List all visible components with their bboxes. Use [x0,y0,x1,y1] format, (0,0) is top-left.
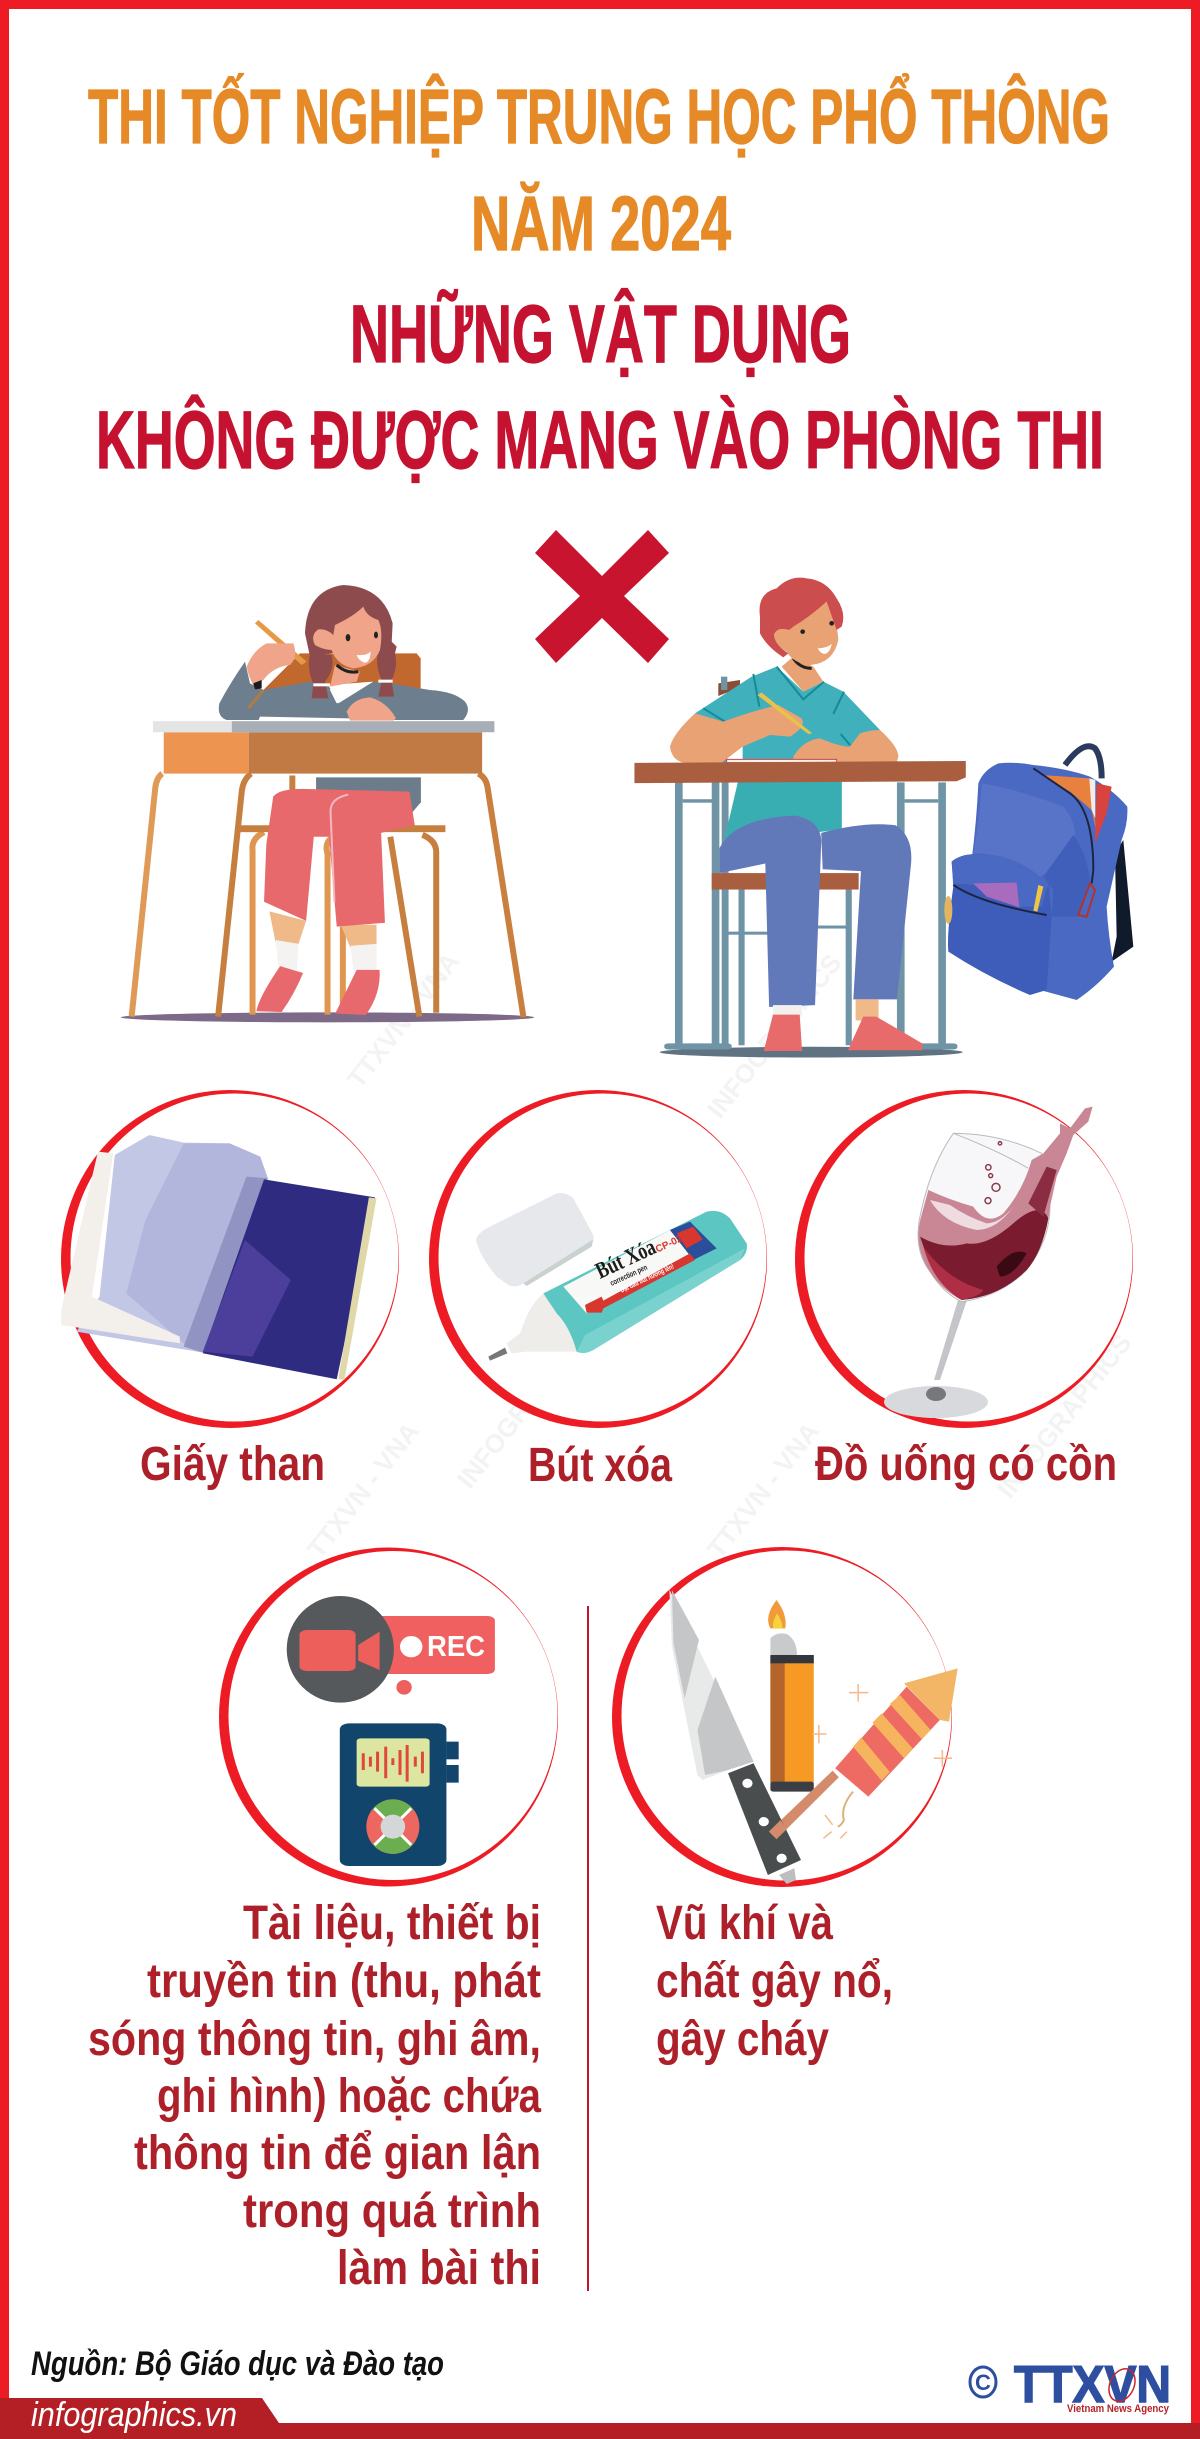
ankles and socks [773,1005,802,1017]
face [774,602,838,665]
resting hand [347,697,396,721]
description: làm bài thi [337,2242,541,2295]
chair seat [236,825,445,832]
choker [793,658,812,668]
circle frame [61,1090,399,1428]
footer band [0,2396,1200,2439]
contents: white sheet [1089,778,1095,818]
contents: orange book [1042,775,1097,833]
illustration: boy at desk [634,578,966,1058]
heading line 3: NHỮNG VẬT DỤNG [350,289,851,380]
dark wine [920,1210,1048,1300]
front pocket [948,854,1052,995]
watermarks: INFOGRAPHICS [701,948,847,1124]
side shade [1043,835,1090,917]
carrying handle [1065,746,1102,778]
zip pull [1078,883,1095,917]
chair seat [712,873,859,890]
pencil [1033,885,1043,912]
shoes [764,1015,802,1051]
agency tagline: Vietnam News Agency [1067,2403,1170,2415]
usage text: Đặt đầu bút hướng lên! [619,1262,675,1294]
eyes [346,634,350,641]
icon: red cross mark [535,530,669,663]
item: communication and recording devices [88,1548,558,2295]
description: truyền tin (thu, phát [147,1955,541,2008]
upper body [219,585,468,721]
illustration: girl at desk [121,585,534,1022]
hair [305,585,393,657]
shirt [695,667,880,763]
neck [782,657,823,692]
label: Bút xóa [528,1439,672,1492]
circle frame [612,1547,952,1887]
chair [252,832,436,1017]
shirt seams [703,667,850,745]
description: ghi hình) hoặc chứa [157,2070,541,2123]
brand text: Bút Xóa [592,1234,660,1284]
clear pocket in wave [930,1200,1013,1230]
choker [337,665,358,672]
lower body and furniture [121,721,534,1022]
socks [276,940,298,970]
floor shadow [121,1012,534,1022]
wine highlights [923,1247,983,1300]
carbon paper picture [61,1135,377,1380]
description [88,1897,541,2295]
pencil [255,620,307,665]
title [88,73,1110,486]
desk legs [132,774,523,1017]
bubbles [985,1142,1002,1204]
main body [970,763,1127,1000]
hoodie [219,662,468,720]
cuff [253,680,262,689]
rec text: REC [427,1631,485,1663]
floor shadow [660,1047,963,1058]
trousers [264,789,415,927]
icons [669,1589,958,1884]
item: alcoholic drinks [795,1090,1133,1491]
circle frame [219,1548,558,1886]
product text: correction pen [609,1263,649,1288]
zipper [1033,768,1093,883]
TTXVN logo [970,2356,1171,2415]
trouser highlight [330,795,348,902]
pink wave and splash [918,1107,1093,1300]
lower shirt [723,779,842,844]
wine glass [884,1107,1093,1418]
description [656,1897,893,2066]
label [563,1230,693,1313]
rocket firework [769,1668,958,1839]
icons [287,1596,495,1866]
item: carbon paper [61,1090,399,1491]
red arrow band [585,1253,695,1313]
voice recorder [340,1723,446,1866]
icon: backpack [944,746,1133,1000]
model text: CP-02 [654,1233,685,1255]
description: gây cháy [656,2013,829,2066]
shoulder strap [1112,840,1133,962]
agency wordmark: TTXVN [1014,2356,1171,2414]
hair [760,578,843,657]
smile [357,652,371,663]
eyes [800,629,805,634]
watermarks: TTXVN - VNA [341,946,465,1094]
cap [476,1193,594,1286]
watermarks: TTXVN - VNA [701,1416,825,1564]
shoes [256,966,303,1012]
label blue end [670,1222,717,1260]
desk metal frame [664,782,957,1049]
description: Tài liệu, thiết bị [243,1897,541,1950]
writing hand [247,643,295,685]
lighter [768,1600,814,1792]
description: trong quá trình [243,2185,541,2238]
chair back [718,680,740,696]
band and tab [0,2398,1200,2439]
body [543,1211,747,1353]
watermarks: INFOGRAPHICS [991,1328,1137,1504]
applicator tip [507,1293,577,1353]
face [313,607,381,668]
circle frame [429,1090,767,1428]
right arm and hand [793,730,898,763]
ankles [269,911,306,944]
copyright mark: C [975,2370,991,2395]
camera badge [287,1596,394,1703]
knife [669,1589,801,1884]
desk top [634,761,966,783]
label: Giấy than [140,1438,325,1491]
label red square [677,1227,703,1248]
watermarks: INFOGRAPHICS [451,1318,597,1494]
contents: red folder [1095,783,1112,843]
description: chất gây nổ, [656,1955,893,2008]
source note: Nguồn: Bộ Giáo dục và Đào tạo [31,2345,444,2383]
left arm and writing hand [670,705,803,763]
description: sóng thông tin, ghi âm, [88,2013,541,2066]
pocket flap [952,854,1048,907]
label: Đồ uống có cồn [815,1438,1117,1491]
watermarks: TTXVN - VNA [301,1416,425,1564]
red swoosh [1104,2365,1140,2405]
light panel [973,783,1075,877]
website: infographics.vn [31,2396,237,2434]
stem and foot [884,1300,988,1418]
zip tag [944,896,952,924]
circle frame [795,1090,1133,1428]
chair back [263,653,421,690]
shirt and neck [328,682,373,703]
lower body and furniture [660,779,963,1058]
desk top [153,721,233,732]
pen picture [476,1193,747,1361]
copyright mark [970,2367,996,2397]
item: weapons and explosives [612,1547,958,2066]
smile [818,644,832,654]
record tag [373,1616,495,1674]
book [727,759,837,763]
pencil [757,693,812,734]
paper [258,717,350,721]
braids [309,653,332,698]
description: thông tin để gian lận [134,2127,541,2180]
upper body [670,578,898,763]
item: correction pen [429,1090,767,1492]
notebook [973,883,1019,907]
divider [587,1606,589,2291]
watermarks [301,946,1137,1564]
torso under desk [316,777,421,816]
bowl and wine [918,1107,1093,1302]
pocket zipper [953,885,1047,915]
description: Vũ khí và [656,1897,833,1950]
jeans [719,816,821,1007]
metal nib [488,1348,507,1361]
desk body [164,732,249,774]
record dot [400,1636,422,1657]
heading line 2: NĂM 2024 [471,181,731,267]
hair ties [313,683,330,686]
